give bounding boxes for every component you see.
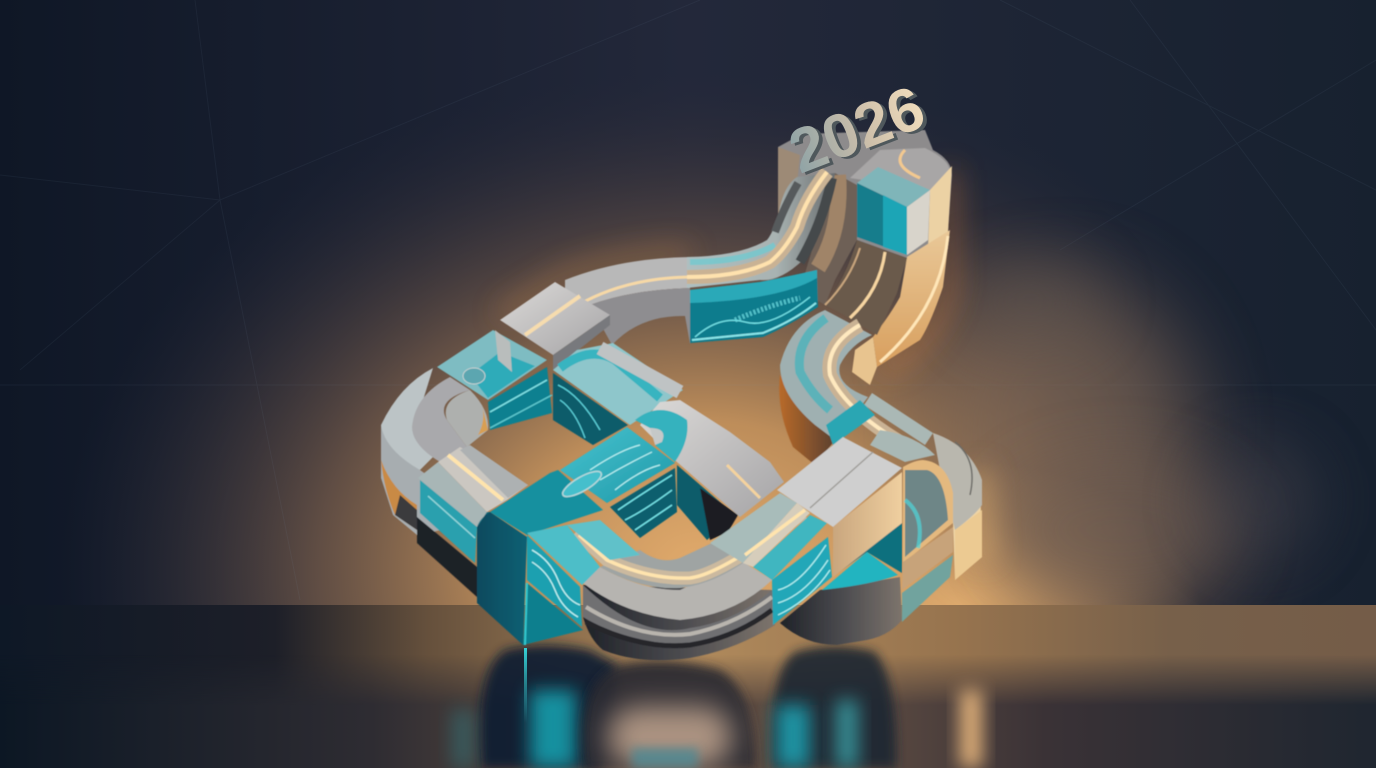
tile side (610, 468, 677, 538)
silver left span (565, 257, 690, 305)
upper right segment: top cap and cube (778, 130, 952, 258)
front curved track (576, 513, 803, 660)
sculpture glow (500, 170, 985, 560)
top surface (583, 562, 772, 620)
floor reflections (452, 645, 982, 768)
back S-curve track (779, 310, 933, 465)
teal side panel (690, 270, 818, 343)
left blob reflection (480, 645, 618, 768)
gold panel rim light (880, 236, 948, 362)
puzzle knob (463, 368, 485, 384)
teal cube (857, 167, 930, 207)
descending gold panel (873, 230, 950, 367)
sculpture body (381, 130, 982, 660)
middle descending track (800, 173, 907, 335)
lower back ring (780, 523, 902, 645)
left corner segment (381, 368, 490, 535)
big silver block (777, 430, 935, 577)
glass upper ribbon (687, 173, 835, 288)
left front glass segment (417, 445, 528, 597)
mid layers (583, 585, 772, 645)
gold streak (960, 690, 982, 768)
year label 2026: 2026 (780, 73, 934, 187)
tile top (560, 427, 675, 503)
smoke cloud (930, 255, 1320, 600)
left top tile (437, 330, 552, 430)
centre teal tile and front block (477, 427, 677, 645)
top cap (778, 130, 952, 258)
centre right arch track (635, 400, 784, 540)
upper centre tile (553, 343, 683, 445)
right blob reflection (771, 646, 896, 768)
lower steel band (583, 585, 775, 660)
gold light line left (570, 277, 690, 310)
front left teal panel (523, 520, 640, 645)
block front (477, 512, 527, 645)
front right glass segment (710, 493, 832, 625)
silver connector block (500, 282, 610, 370)
arch frame (903, 460, 953, 563)
right corner (902, 433, 982, 622)
year label 2026: 2026 (784, 75, 938, 189)
upper horizontal track (565, 172, 835, 345)
block top (490, 470, 603, 535)
background wall (0, 0, 1376, 606)
centre blob reflection (583, 661, 755, 768)
floor (0, 605, 1376, 768)
